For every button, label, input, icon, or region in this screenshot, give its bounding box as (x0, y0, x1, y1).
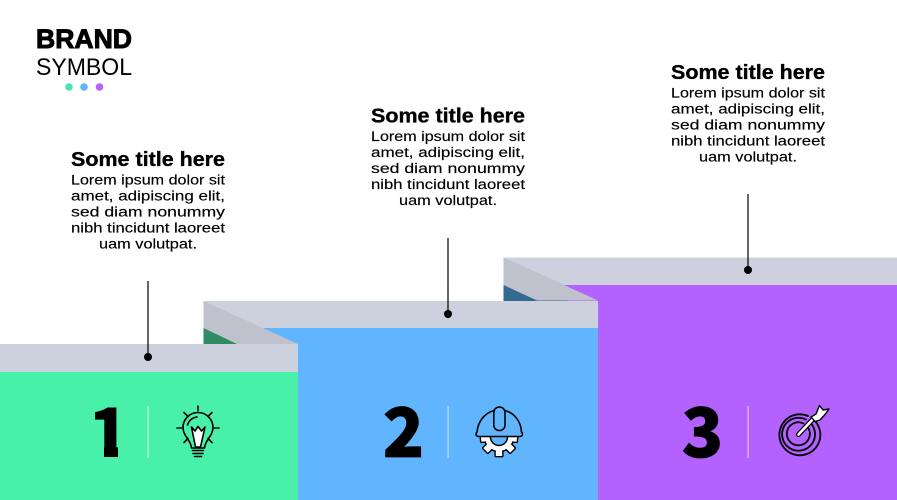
text block 1 (71, 149, 225, 252)
divider 1 (148, 406, 149, 458)
icon: light bulb (177, 406, 219, 456)
connector 2 (444, 238, 452, 318)
text block 1: Some title here (71, 149, 225, 171)
text block 3: Some title here (671, 62, 825, 84)
text block 2: Some title here (371, 106, 525, 128)
step 2 panel: blue (204, 258, 598, 500)
brand logo: BRAND (36, 24, 132, 54)
text block 2: Lorem ipsum dolor sit (371, 129, 525, 144)
text block 1: Lorem ipsum dolor sit (71, 172, 225, 188)
brand logo: SYMBOL (36, 54, 132, 81)
text block 3: uam volutpat. (699, 150, 797, 164)
connector 3 (744, 194, 752, 274)
number 1: 1 (88, 378, 130, 477)
icon: helmet and gear (476, 407, 522, 456)
text block 2: nibh tincidunt laoreet (371, 177, 525, 192)
divider 3 (748, 406, 749, 458)
text block 1: nibh tincidunt laoreet (71, 220, 225, 236)
divider 2 (448, 406, 449, 458)
connector 1 (144, 281, 152, 361)
number 2: 2 (383, 378, 424, 477)
text block 2: uam volutpat. (399, 193, 497, 208)
text block 3: sed diam nonummy (671, 118, 825, 132)
number 3: 3 (682, 378, 723, 477)
icon: target with arrow (779, 406, 829, 455)
step 1 panel: green (0, 344, 298, 500)
text block 2: amet, adipiscing elit, (371, 145, 525, 160)
text block 1: uam volutpat. (99, 236, 197, 252)
text block 2: sed diam nonummy (371, 161, 525, 176)
text block 2 (371, 106, 525, 208)
step 3 panel: purple (504, 258, 897, 500)
text block 3: amet, adipiscing elit, (671, 102, 825, 116)
text block 3: nibh tincidunt laoreet (671, 134, 825, 148)
brand logo (36, 24, 132, 91)
text block 1: sed diam nonummy (71, 204, 225, 220)
text block 1: amet, adipiscing elit, (71, 188, 225, 204)
text block 3 (671, 62, 825, 164)
text block 3: Lorem ipsum dolor sit (671, 86, 825, 100)
